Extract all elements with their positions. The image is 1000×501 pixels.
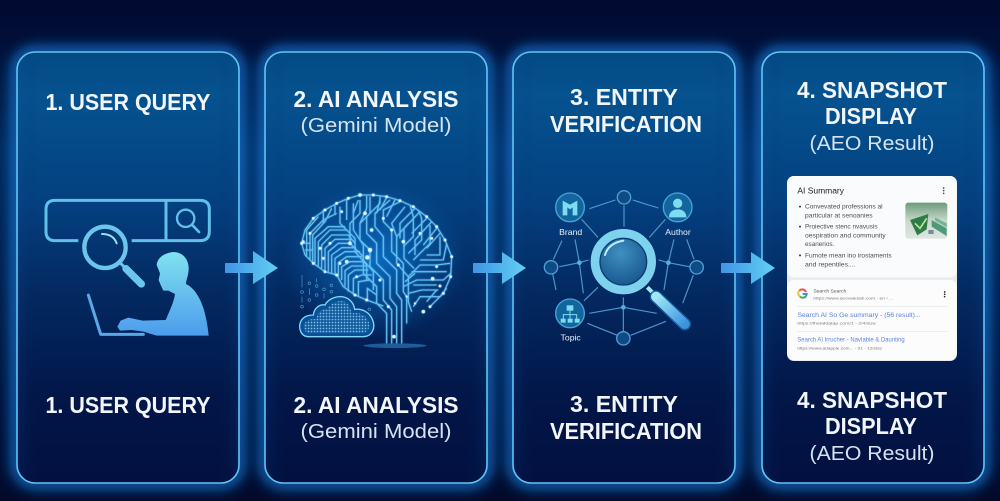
arrow: analysis to verification xyxy=(473,252,526,284)
card: ai summary: and repentiles.... xyxy=(805,261,856,268)
card: search results xyxy=(787,280,957,360)
card: search results: https://www.seovalesab.com · en › ... xyxy=(813,295,893,300)
google logo xyxy=(798,289,807,298)
heading: snapshot display bottom: 4. SNAPSHOT xyxy=(797,387,947,413)
heading: ai analysis top: 2. AI ANALYSIS xyxy=(294,86,458,112)
icon: circuit brain with cloud xyxy=(283,182,467,348)
card: ai summary xyxy=(787,176,957,277)
node: topic: Topic xyxy=(561,333,581,343)
icon: person xyxy=(117,252,209,336)
heading: entity verification top: 3. ENTITY xyxy=(570,84,678,110)
thumbnail image xyxy=(905,203,947,239)
node: topic xyxy=(556,299,584,343)
icon: laptop xyxy=(88,295,143,334)
heading: ai analysis bottom: 2. AI ANALYSIS xyxy=(294,392,458,418)
subheading: gemini model bottom: (Gemini Model) xyxy=(300,421,452,443)
heading: entity verification top: VERIFICATION xyxy=(550,111,702,137)
icon: cloud xyxy=(300,297,374,337)
node: author xyxy=(663,193,692,237)
heading: entity verification bottom: 3. ENTITY xyxy=(570,391,678,417)
heading: user query top: 1. USER QUERY xyxy=(46,89,210,115)
panel: user query xyxy=(17,52,239,483)
icon: large magnifier xyxy=(84,227,141,284)
card: search results: https://thelatdatap.com/1 - 2/4/size xyxy=(797,321,877,326)
card: ai summary: Proiective stenc nvavusis xyxy=(805,224,878,231)
node: brand xyxy=(556,193,584,237)
icon: search bar and user at laptop xyxy=(46,200,209,336)
panel: entity verification xyxy=(513,52,735,483)
card: search results: Search Search xyxy=(813,288,847,294)
card: ai summary: Fumote mean ino irostaments xyxy=(805,252,892,259)
card: ai summary: particular at senoanies xyxy=(805,213,873,220)
brain nodes xyxy=(300,193,453,338)
card: ai summary: AI Summary xyxy=(797,186,844,195)
heading: user query bottom: 1. USER QUERY xyxy=(46,392,210,418)
card: search results: Search AI Irrucher - NavIable & Daunting xyxy=(797,338,905,344)
card: search results: Search AI So Ge summary - (56 result)... xyxy=(797,313,921,319)
card: ai summary: esanerios. xyxy=(805,241,835,248)
panel: ai analysis xyxy=(265,52,487,483)
subheading: aeo result bottom: (AEO Result) xyxy=(810,443,934,465)
heading: snapshot display bottom: DISPLAY xyxy=(825,413,917,439)
heading: snapshot display top: DISPLAY xyxy=(825,103,917,129)
card: search result mockup xyxy=(787,176,957,361)
node: brand: Brand xyxy=(559,227,582,237)
card: ai summary: oespiration and community xyxy=(805,233,887,240)
brain circuit traces xyxy=(302,195,452,343)
icon: entity network and magnifier xyxy=(544,191,703,345)
panel: snapshot display xyxy=(762,52,984,483)
card: ai summary: Convevated professions al xyxy=(805,204,883,211)
plain nodes xyxy=(544,191,703,345)
search bar xyxy=(46,200,209,241)
central magnifier xyxy=(595,234,685,324)
subheading: aeo result top: (AEO Result) xyxy=(810,133,934,155)
arrow: query to analysis xyxy=(225,251,278,284)
subheading: gemini model top: (Gemini Model) xyxy=(300,115,452,137)
data dots xyxy=(301,275,371,311)
heading: snapshot display top: 4. SNAPSHOT xyxy=(797,77,947,103)
arrow: verification to snapshot xyxy=(721,252,775,284)
node: author: Author xyxy=(665,227,691,237)
network lines xyxy=(553,200,694,335)
small junction nodes xyxy=(577,260,671,310)
card: search results: https://www.adapple.com... · 01 · 12/size xyxy=(797,345,883,350)
heading: entity verification bottom: VERIFICATION xyxy=(550,418,702,444)
base glow xyxy=(363,343,427,348)
